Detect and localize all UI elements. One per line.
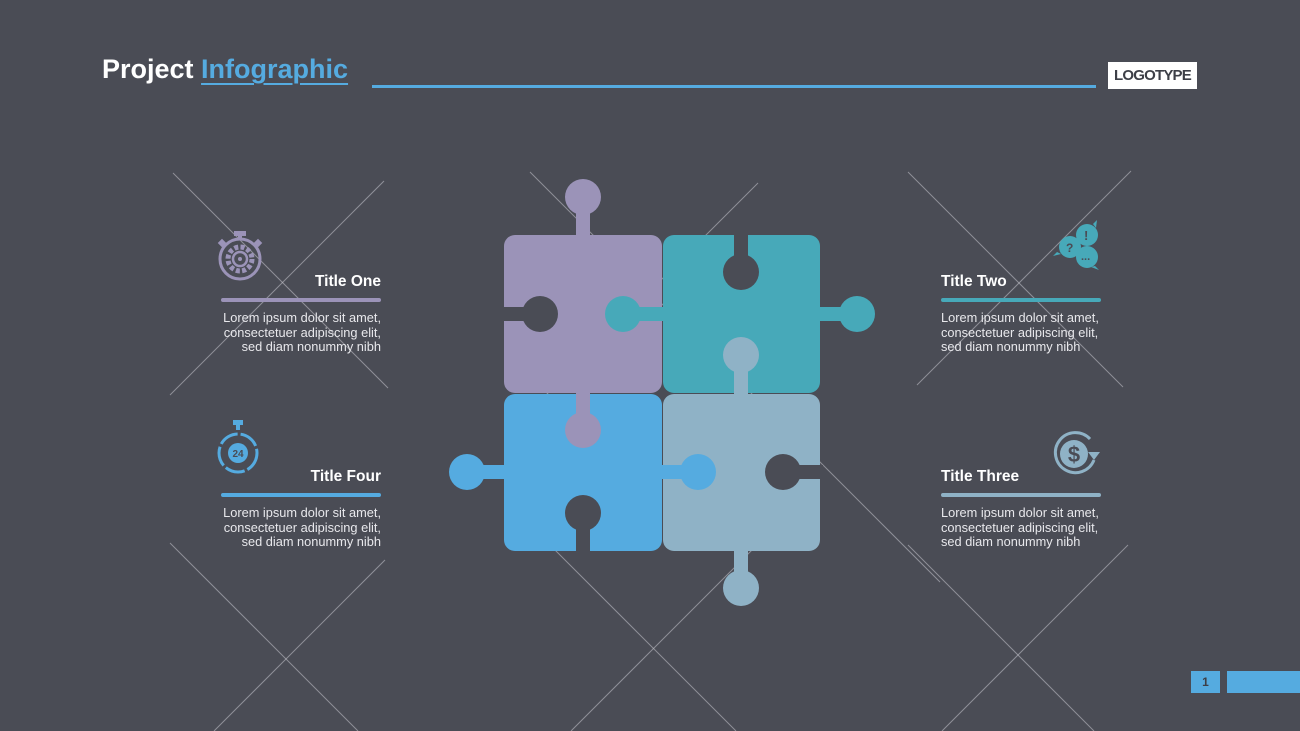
- icon: dollar cycle: $: [1068, 442, 1080, 467]
- icon: 24 timer: [218, 420, 258, 474]
- page number: 1: [1202, 675, 1209, 689]
- panel: title three: Lorem ipsum dolor sit amet,: [941, 505, 1099, 520]
- panel: title one: Title One: [315, 273, 381, 290]
- panel: title two: Title Two: [941, 273, 1007, 290]
- title: Project Infographic: [102, 54, 348, 84]
- panel: title two: sed diam nonummy nibh: [941, 339, 1080, 354]
- icon: speech bubbles: ?: [1066, 241, 1073, 255]
- panel: title one: [221, 273, 381, 354]
- piece: teal: [663, 235, 875, 393]
- piece: blue: [449, 394, 662, 551]
- piece: light: [663, 394, 820, 606]
- panel: title two: [941, 273, 1101, 354]
- panel: title one: Lorem ipsum dolor sit amet,: [223, 310, 381, 325]
- icon: stopwatch gear: [218, 231, 262, 280]
- panel: title four: consectetuer adipiscing elit,: [224, 520, 381, 534]
- overlapping knobs: [565, 296, 759, 490]
- panel: title two: Lorem ipsum dolor sit amet,: [941, 310, 1099, 325]
- panel: title three: Title Three: [941, 468, 1019, 485]
- holes: [500, 231, 823, 555]
- piece: purple: [504, 179, 662, 393]
- footer bar: [1227, 671, 1300, 693]
- panel: title four: [221, 468, 381, 549]
- panel: title four: Title Four: [311, 468, 381, 485]
- icon: speech bubbles: !: [1084, 228, 1088, 243]
- logotype: [1108, 62, 1197, 89]
- panel: title four: sed diam nonummy nibh: [242, 534, 381, 549]
- icon: speech bubbles: [1053, 220, 1099, 270]
- panel: title three: consectetuer adipiscing elit,: [941, 520, 1098, 534]
- icon: 24 timer: 24: [232, 449, 244, 460]
- panel: title one: consectetuer adipiscing elit,: [224, 324, 381, 340]
- page number: [1191, 671, 1220, 693]
- logotype: LOGOTYPE: [1114, 67, 1191, 84]
- panel: title four: Lorem ipsum dolor sit amet,: [223, 505, 381, 520]
- panel: title three: [941, 468, 1101, 549]
- icon: dollar cycle: [1054, 431, 1100, 474]
- panel: title two: consectetuer adipiscing elit,: [941, 324, 1098, 340]
- header rule: [372, 85, 1096, 88]
- panel: title one: sed diam nonummy nibh: [242, 339, 381, 354]
- panel: title three: sed diam nonummy nibh: [941, 534, 1080, 549]
- icon: speech bubbles: ...: [1081, 251, 1090, 263]
